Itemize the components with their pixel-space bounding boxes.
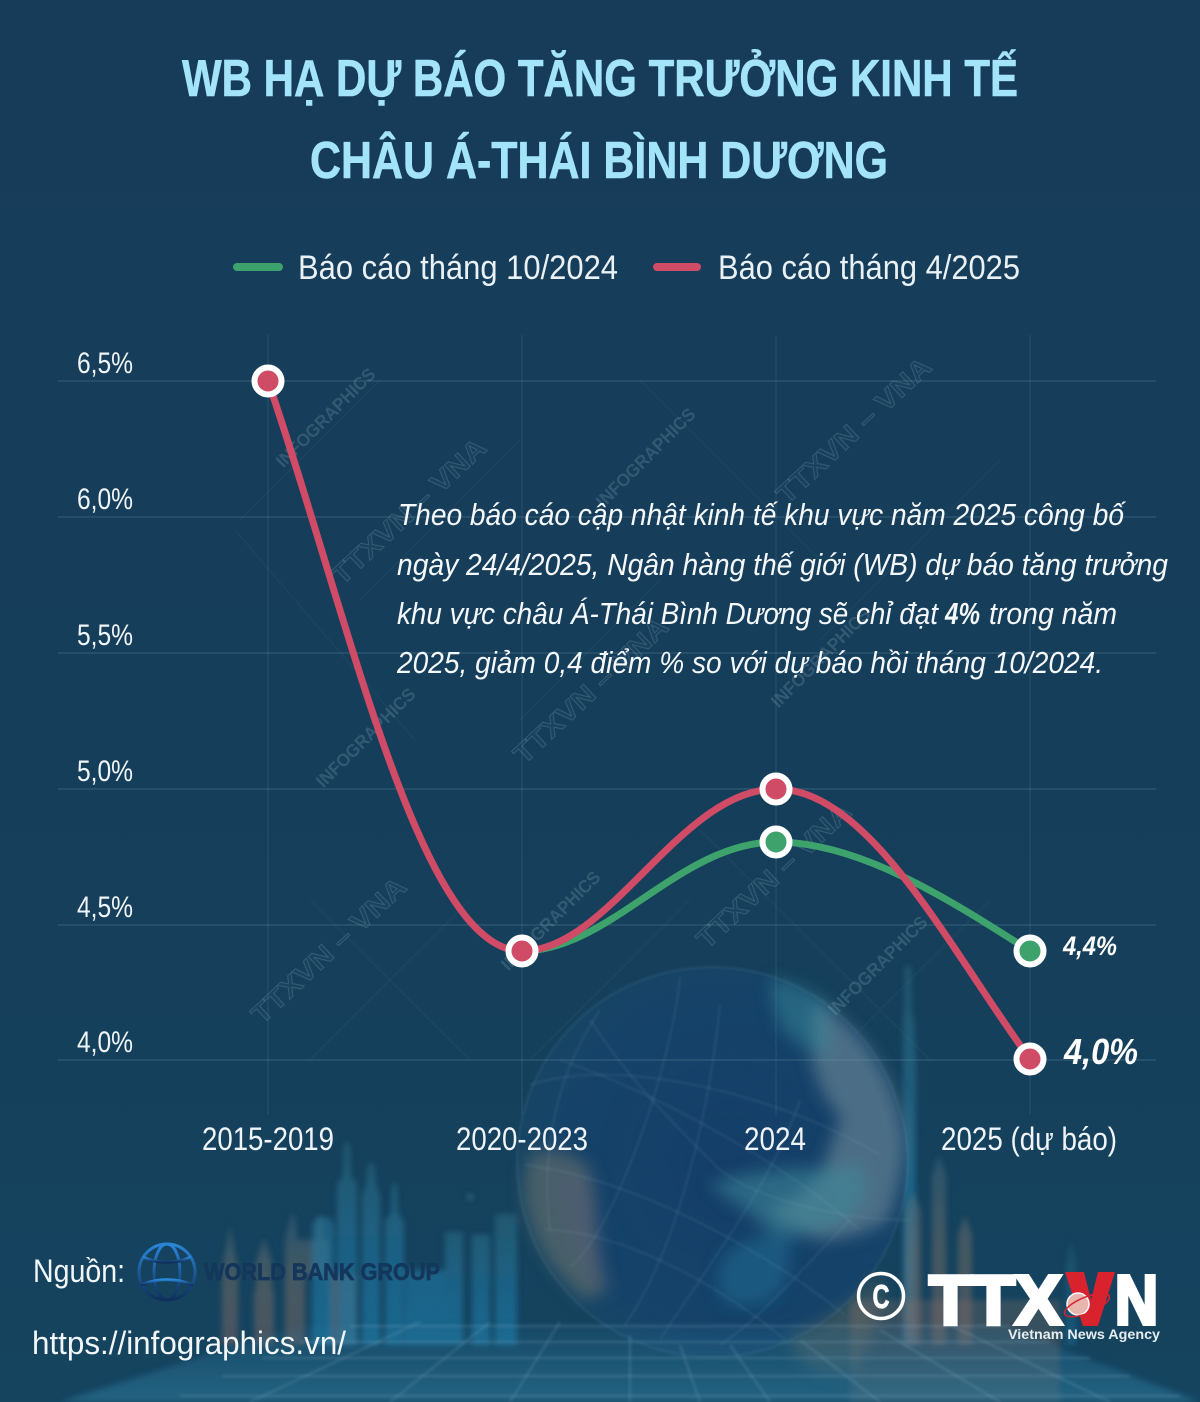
decorative perspective floor bbox=[60, 1322, 1200, 1402]
y axis labels: 4,5% bbox=[77, 891, 133, 924]
watermarks: INFOGRAPHICS bbox=[824, 912, 931, 1019]
line series: report 10/2024 bbox=[522, 842, 1030, 951]
x axis labels: 2025 (dự báo) bbox=[941, 1121, 1117, 1157]
x axis labels: 2024 bbox=[744, 1121, 806, 1157]
source label: Nguồn: bbox=[33, 1253, 125, 1289]
y axis labels: 5,0% bbox=[77, 755, 133, 788]
watermarks: INFOGRAPHICS bbox=[767, 604, 874, 711]
watermarks: TTXVN – VNA bbox=[690, 796, 857, 955]
logo: TTXVN: N bbox=[1115, 1261, 1158, 1339]
copyright icon bbox=[858, 1274, 904, 1318]
watermarks bbox=[245, 351, 937, 1030]
summary paragraph: khu vực châu Á-Thái Bình Dương sẽ chỉ đạt bbox=[397, 596, 939, 631]
x axis labels: 2020-2023 bbox=[456, 1121, 588, 1157]
x axis labels bbox=[202, 1121, 1117, 1157]
y axis labels: 6,0% bbox=[77, 483, 133, 516]
y axis labels: 5,5% bbox=[77, 619, 133, 652]
decorative globe bbox=[517, 967, 910, 1376]
logo: TTXVN: TTX bbox=[929, 1261, 1062, 1339]
watermarks: INFOGRAPHICS bbox=[272, 364, 379, 471]
watermarks: INFOGRAPHICS bbox=[592, 404, 699, 511]
watermarks: TTXVN – VNA bbox=[325, 432, 492, 591]
watermarks: TTXVN – VNA bbox=[245, 871, 412, 1030]
logo: TTXVN: Vietnam News Agency bbox=[1008, 1327, 1161, 1342]
title: WB HẠ DỰ BÁO TĂNG TRƯỞNG KINH TẾ bbox=[182, 49, 1018, 108]
logo: TTXVN bbox=[929, 1261, 1161, 1342]
logo: World Bank Group: WORLD BANK GROUP bbox=[204, 1259, 440, 1286]
summary paragraph: Theo báo cáo cập nhật kinh tế khu vực năm 2025 công bố bbox=[398, 497, 1126, 532]
legend: Báo cáo tháng 10/2024 bbox=[298, 249, 618, 287]
chart grid bbox=[58, 335, 1156, 1115]
watermarks: TTXVN – VNA bbox=[770, 351, 937, 510]
copyright icon: C bbox=[872, 1278, 890, 1315]
y axis labels bbox=[77, 347, 133, 1059]
decorative city skyline bbox=[222, 966, 1076, 1402]
watermarks: INFOGRAPHICS bbox=[497, 867, 604, 974]
title: CHÂU Á-THÁI BÌNH DƯƠNG bbox=[310, 131, 888, 190]
logo: World Bank Group bbox=[139, 1244, 440, 1300]
watermarks: INFOGRAPHICS bbox=[312, 684, 419, 791]
summary paragraph: 4% bbox=[944, 596, 980, 631]
summary paragraph bbox=[396, 497, 1168, 680]
decorative diagonal background lines bbox=[235, 380, 1000, 1060]
x axis labels: 2015-2019 bbox=[202, 1121, 334, 1157]
legend bbox=[237, 249, 1020, 287]
summary paragraph: trong năm bbox=[989, 596, 1117, 631]
value label 4,4%: 4,4% bbox=[1062, 931, 1117, 961]
data markers bbox=[254, 368, 1044, 1072]
legend: Báo cáo tháng 4/2025 bbox=[718, 249, 1020, 287]
line series: report 4/2025 bbox=[268, 381, 1030, 1059]
title bbox=[182, 49, 1018, 190]
y axis labels: 4,0% bbox=[77, 1026, 133, 1059]
value label 4,0%: 4,0% bbox=[1063, 1031, 1138, 1072]
watermarks: TTXVN – VNA bbox=[507, 611, 674, 770]
summary paragraph: 2025, giảm 0,4 điểm % so với dự báo hồi tháng 10/2024. bbox=[396, 645, 1103, 680]
y axis labels: 6,5% bbox=[77, 347, 133, 380]
website url: https://infographics.vn/ bbox=[32, 1325, 346, 1361]
